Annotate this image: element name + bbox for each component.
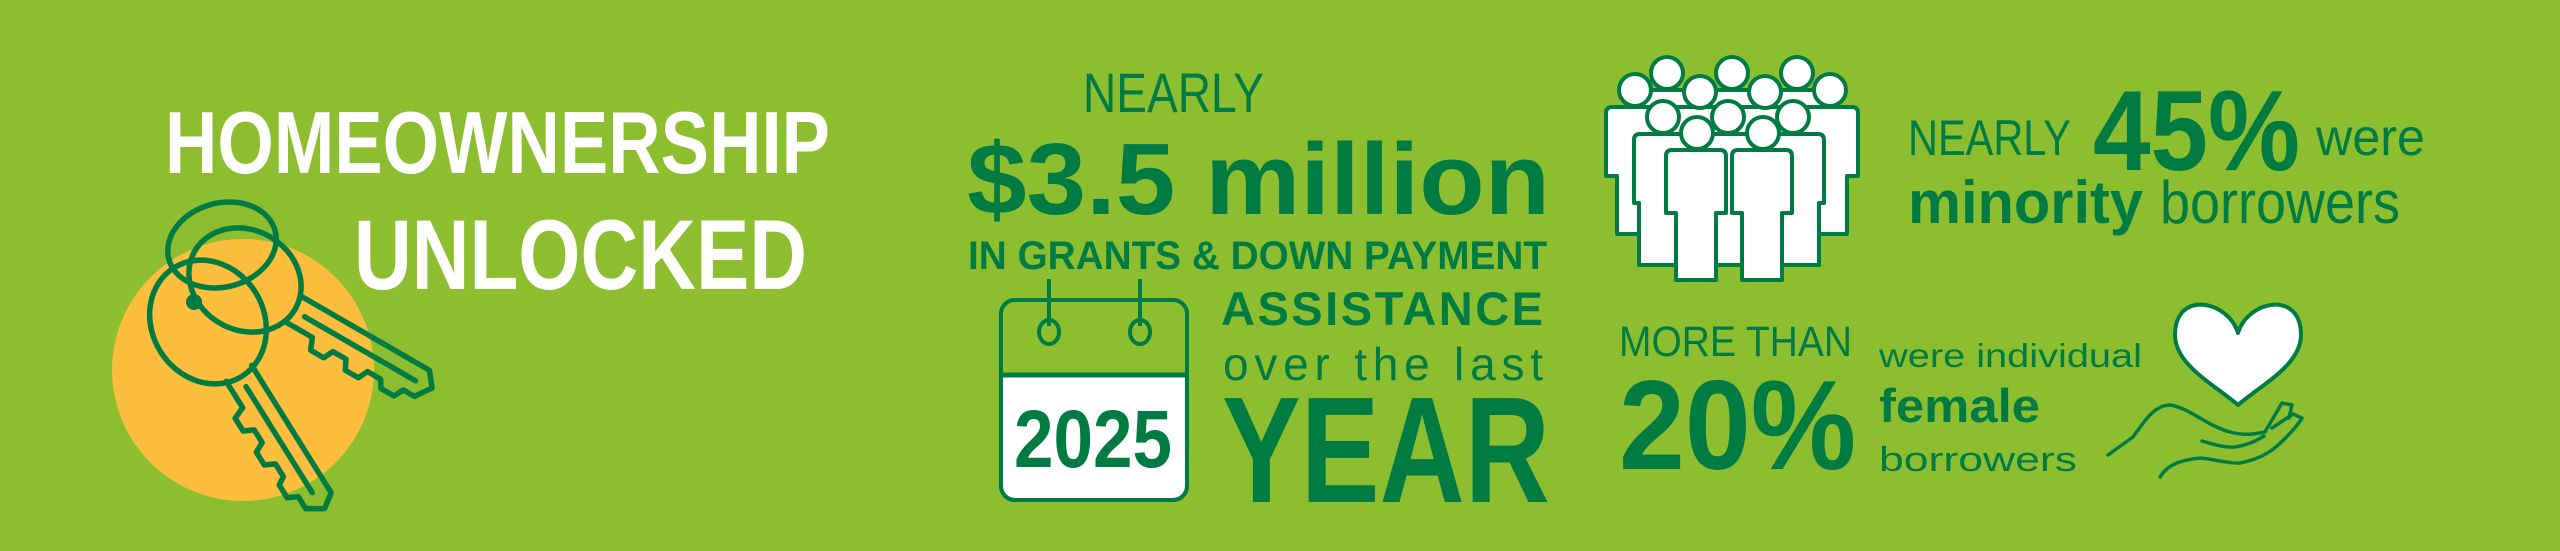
text block: 20% female: female [1879,379,2040,432]
text block: 20% female: 20% [1619,354,1856,496]
text block: grants stat: ASSISTANCE [1221,282,1543,335]
text block: grants stat: $3.5 million [967,124,1550,236]
text block: 45% minority: were [2315,109,2425,167]
icon: group of people [1606,57,1858,280]
text block: grants stat [967,61,1550,534]
text block: 45% minority: NEARLY [1908,110,2071,166]
text block: grants stat: over the last [1223,338,1543,390]
text block: grants stat: NEARLY [1083,61,1264,124]
text block: grants stat: IN GRANTS & DOWN PAYMENT [968,234,1547,278]
text block: 20% female: borrowers [1879,441,2077,479]
title: HOMEOWNERSHIP: HOMEOWNERSHIP [165,93,830,192]
text block: 45% minority [1908,68,2425,236]
text block: 20% female: were individual [1878,337,2142,374]
icon: calendar 2025 [1001,279,1187,500]
text block: 45% minority: minority [1908,169,2144,236]
text block: 20% female: MORE THAN [1619,318,1852,366]
icon: heart in hand [2108,305,2302,477]
text block: 45% minority: 45% [2093,68,2300,195]
title: UNLOCKED: UNLOCKED [354,199,807,310]
text block: 20% female [1619,318,2142,496]
text block: 45% minority: borrowers [2160,169,2400,236]
text block: grants stat: YEAR [1222,365,1550,534]
icon: calendar 2025: 2025 [1014,394,1172,485]
icon: keys on yellow circle [112,190,457,538]
